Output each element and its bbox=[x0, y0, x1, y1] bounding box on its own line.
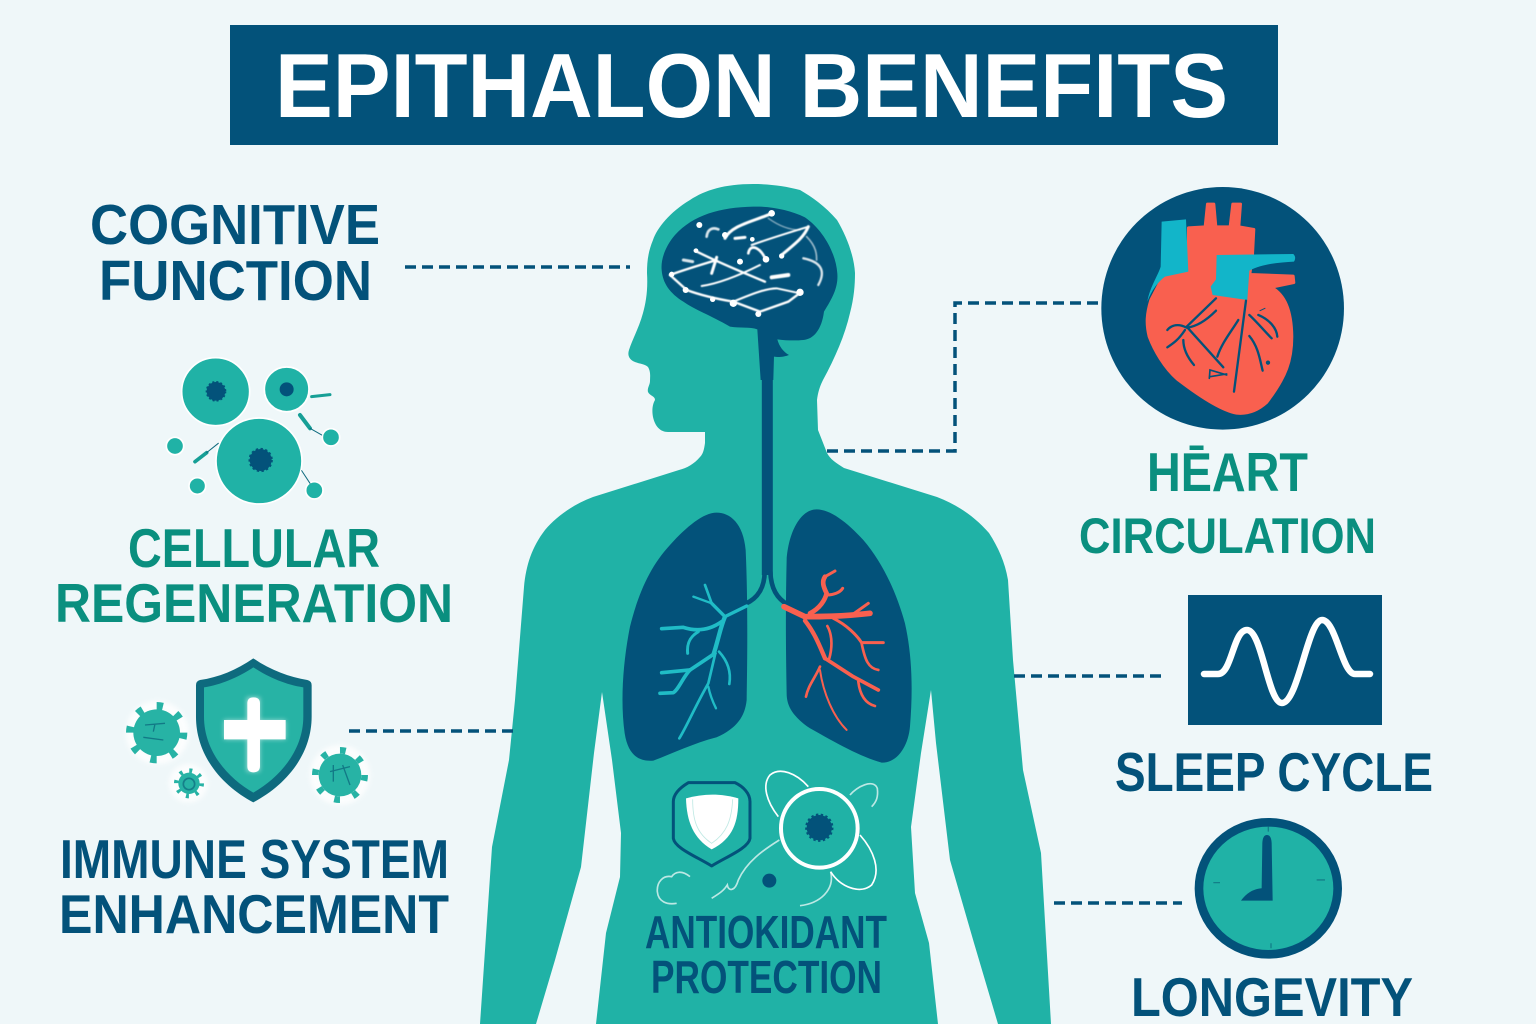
heart circulation label: CIRCULATION bbox=[1079, 508, 1376, 564]
shield bbox=[196, 658, 312, 802]
heart body bbox=[1147, 204, 1294, 414]
body silhouette bbox=[480, 184, 1051, 1024]
immune system label: IMMUNE SYSTEM bbox=[60, 828, 449, 890]
antioxidant label: ANTIOKIDANT bbox=[645, 906, 887, 958]
cellular regeneration label bbox=[55, 517, 453, 634]
connector: immune bbox=[349, 729, 513, 733]
icon: clock bbox=[1199, 822, 1338, 954]
coral bronchi bbox=[784, 571, 883, 730]
connector: longevity bbox=[1054, 901, 1182, 905]
icon: sleep wave bbox=[1188, 595, 1382, 725]
heart circulation label bbox=[1079, 441, 1376, 564]
cognitive function label: COGNITIVE bbox=[90, 193, 380, 257]
antioxidant label: PROTECTION bbox=[651, 951, 882, 1003]
heart circulation label: HĒART bbox=[1147, 441, 1308, 503]
white shield bbox=[686, 795, 738, 849]
icon: heart bbox=[1101, 187, 1344, 430]
virus right bbox=[315, 750, 365, 800]
sleep cycle label: SLEEP CYCLE bbox=[1115, 741, 1433, 803]
right lung bbox=[786, 509, 912, 763]
trachea and lungs bbox=[622, 370, 912, 763]
brain bbox=[662, 207, 837, 380]
coronary vessels bbox=[1167, 298, 1277, 392]
antioxidant label bbox=[645, 906, 887, 1003]
cognitive function label bbox=[90, 193, 380, 313]
virus small bbox=[176, 771, 202, 796]
title: EPITHALON BENEFITS bbox=[275, 36, 1228, 137]
virus left bbox=[130, 706, 183, 759]
virus halos bbox=[126, 701, 189, 764]
brain filaments bbox=[670, 213, 822, 312]
connector: sleep bbox=[1014, 674, 1162, 678]
connector: heart bbox=[827, 303, 1100, 451]
icon: immune shield and viruses bbox=[126, 658, 370, 805]
cognitive function label: FUNCTION bbox=[99, 249, 372, 313]
atom rings bbox=[657, 771, 878, 906]
immune system label: ENHANCEMENT bbox=[59, 883, 449, 945]
left lung bbox=[622, 513, 747, 761]
cellular regeneration label: REGENERATION bbox=[55, 572, 453, 634]
cellular regeneration label: CELLULAR bbox=[128, 517, 380, 579]
blue vessels bbox=[1147, 219, 1188, 302]
connector: cognitive bbox=[405, 265, 630, 269]
cell ring bbox=[781, 789, 858, 868]
shield outline bbox=[673, 783, 750, 866]
cyan bronchi bbox=[660, 585, 747, 738]
antioxidant icons bbox=[657, 771, 878, 906]
icon: cells bbox=[166, 358, 340, 504]
immune system label bbox=[59, 828, 449, 945]
